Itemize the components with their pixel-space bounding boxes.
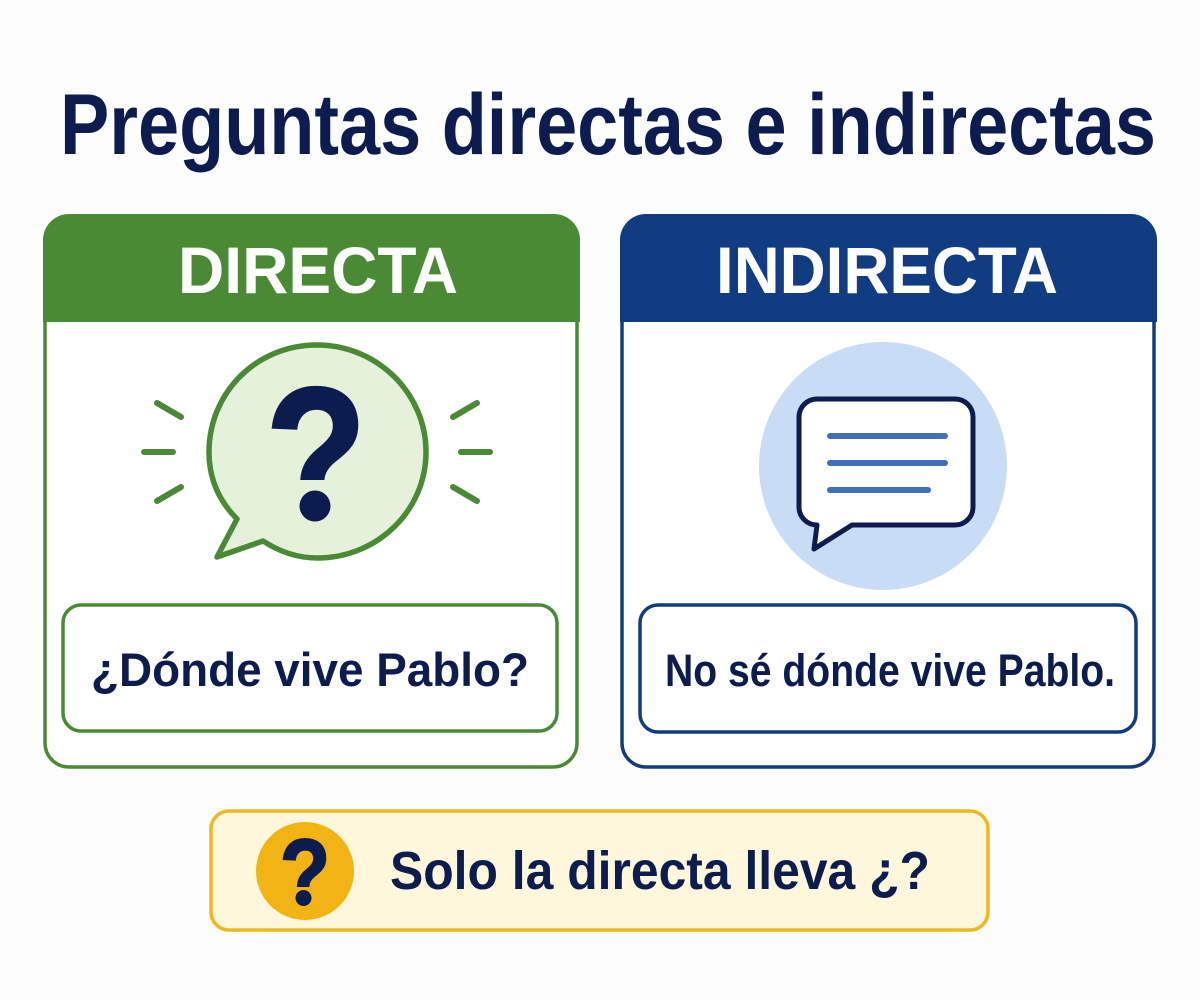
panel: indirecta (620, 214, 1157, 767)
icon: statement speech bubble (759, 342, 1007, 590)
header: directa (43, 214, 580, 322)
icon: emphasis rays right (453, 403, 490, 501)
icon: emphasis rays left (144, 403, 181, 501)
icon: yellow question mark: ? (280, 819, 330, 926)
panel: directa (43, 214, 580, 767)
example box: indirecta (640, 605, 1136, 732)
header: directa: DIRECTA (178, 233, 458, 307)
callout (211, 811, 988, 930)
header: indirecta: INDIRECTA (716, 233, 1058, 307)
example box: directa (63, 605, 557, 731)
callout text: Solo la directa lleva ¿? (390, 841, 930, 901)
icon: question speech bubble (209, 345, 426, 561)
icon: question speech bubble: ? (266, 348, 366, 561)
icon: yellow question mark (256, 819, 354, 926)
example box: indirecta: No sé dónde vive Pablo. (665, 645, 1115, 696)
header: indirecta (620, 214, 1157, 322)
example box: directa: ¿Dónde vive Pablo? (91, 643, 529, 696)
